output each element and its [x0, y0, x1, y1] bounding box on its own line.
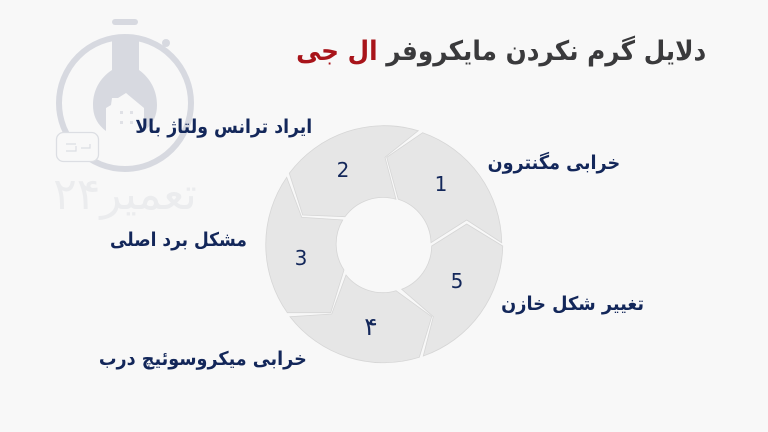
- label: cause 1: خرابی مگنترون: [487, 152, 620, 174]
- title: دلایل گرم نکردن مایکروفر ال جی: [296, 36, 706, 67]
- watermark: badge: [56, 132, 98, 162]
- label: cause 2: ایراد ترانس ولتاژ بالا: [135, 116, 312, 138]
- segment numbers: 5: [451, 269, 463, 293]
- segment numbers: 2: [337, 158, 349, 182]
- segment 2: [289, 126, 418, 217]
- segment 5: [402, 224, 503, 356]
- segment 1: [387, 133, 502, 243]
- label: cause 5: تغییر شکل خازن: [501, 293, 644, 315]
- circular diagram: [266, 126, 503, 363]
- segment numbers: [295, 158, 463, 341]
- label: cause 4: خرابی میکروسوئیچ درب: [99, 348, 307, 370]
- watermark: brand name: تعمیر۲۴: [53, 169, 197, 220]
- watermark: stopwatch and wrench: [59, 19, 191, 169]
- segment 3: [266, 177, 344, 313]
- label: cause 3: مشکل برد اصلی: [110, 229, 247, 251]
- segment numbers: 1: [435, 172, 447, 196]
- segment numbers: ۴: [364, 312, 378, 341]
- segment 4: [290, 275, 432, 363]
- segment numbers: 3: [295, 246, 307, 270]
